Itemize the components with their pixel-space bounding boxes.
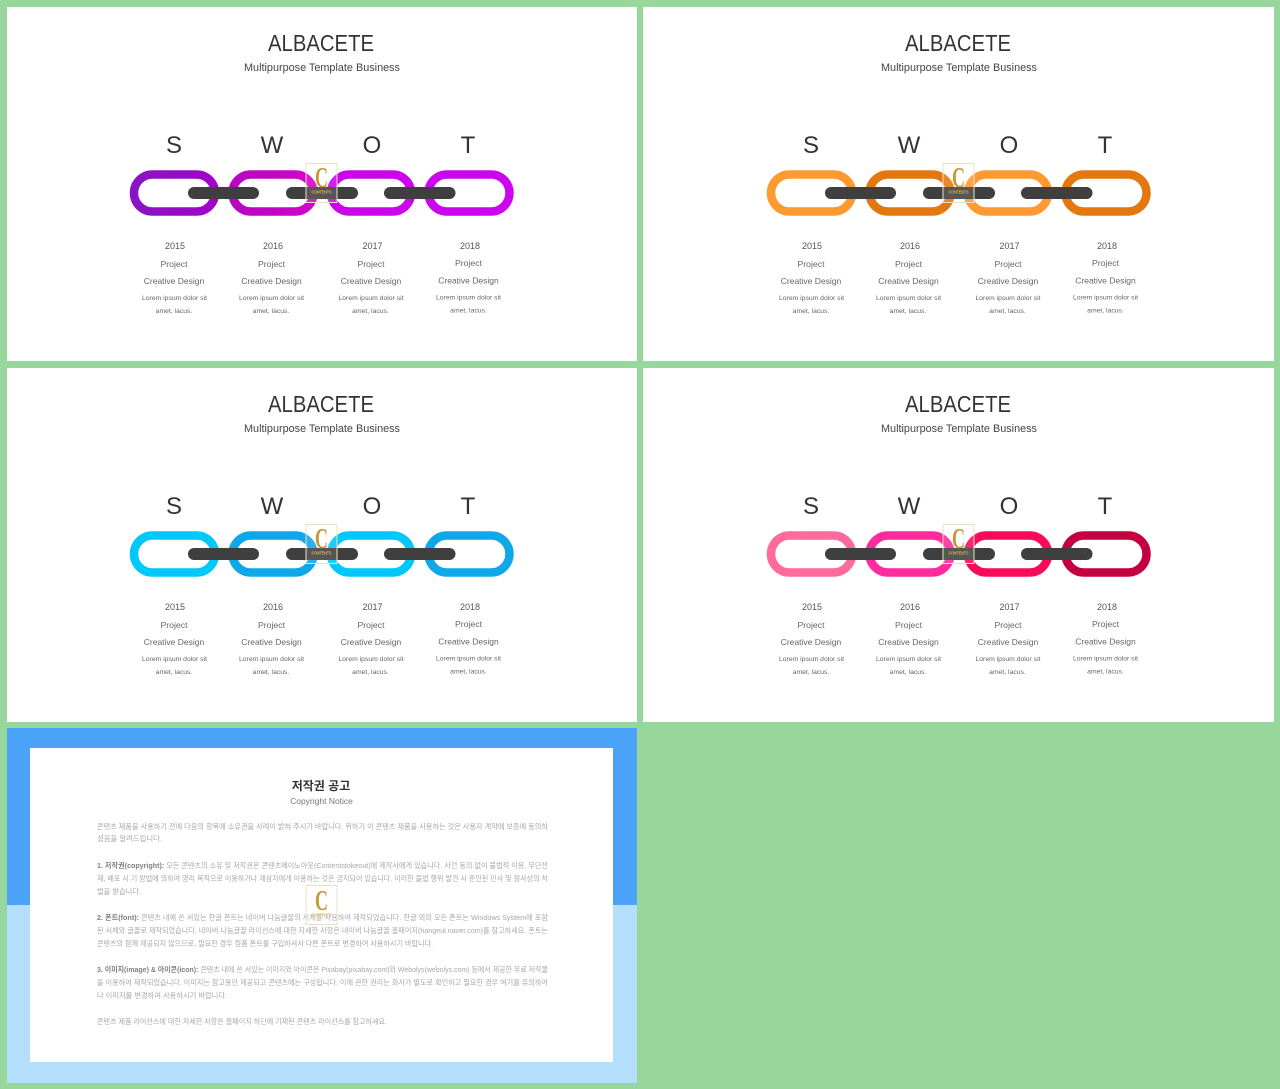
column texts: Creative Design bbox=[1075, 636, 1136, 646]
SWOT letters: W bbox=[898, 132, 921, 159]
column texts: 2016 bbox=[900, 241, 920, 251]
column texts: Project bbox=[895, 259, 923, 269]
column texts: 2018 bbox=[460, 241, 480, 251]
column texts: Creative Design bbox=[241, 637, 302, 647]
column texts: 2015 bbox=[165, 241, 185, 251]
column texts bbox=[779, 241, 1138, 315]
column texts: Lorem ipsum dolor sit bbox=[436, 294, 501, 302]
panel: SWOT pink bbox=[643, 368, 1274, 722]
column texts: Creative Design bbox=[144, 276, 205, 286]
title: ALBACETE bbox=[268, 391, 374, 417]
icon: watermark logo: C bbox=[952, 524, 965, 555]
column texts: amet, lacus. bbox=[156, 308, 192, 315]
chain links bbox=[134, 174, 510, 212]
intro text: 셨음을 알려드립니다. bbox=[97, 833, 162, 843]
column texts: amet, lacus. bbox=[890, 669, 926, 676]
column texts: Lorem ipsum dolor sit bbox=[779, 295, 844, 302]
column texts: 2015 bbox=[802, 602, 822, 612]
license note: 콘텐츠 제품 라이선스에 대한 자세한 사항은 홈페이지 하단에 기재된 콘텐츠 라이선스를 참고하세요. bbox=[97, 1016, 387, 1026]
column texts: Creative Design bbox=[341, 276, 402, 286]
SWOT letters: T bbox=[461, 493, 476, 520]
column texts: 2018 bbox=[1097, 241, 1117, 251]
column texts: amet, lacus. bbox=[1087, 308, 1124, 314]
SWOT letters bbox=[166, 493, 476, 520]
icon: watermark logo bbox=[306, 163, 337, 202]
icon: watermark logo: CONTENTS bbox=[312, 550, 332, 556]
column texts: amet, lacus. bbox=[352, 308, 389, 315]
column texts: Lorem ipsum dolor sit bbox=[876, 295, 941, 302]
column texts: Lorem ipsum dolor sit bbox=[142, 295, 207, 302]
section 1 copyright: 1. 저작권(copyright): 모든 콘텐츠의 소유 및 저작권은 콘텐츠메이노아웃(Contentstokeout)에 제작사에게 있습니다. 사전 동의 없이 불법적 이용, 무단전 bbox=[97, 860, 548, 870]
column texts: Creative Design bbox=[878, 637, 939, 647]
column texts: Creative Design bbox=[978, 276, 1039, 286]
icon: watermark logo: C bbox=[315, 524, 328, 555]
column texts: Project bbox=[895, 620, 923, 630]
column texts: Lorem ipsum dolor sit bbox=[239, 656, 304, 663]
section 1 copyright: 벌을 받습니다. bbox=[97, 886, 141, 896]
SWOT letters: T bbox=[1098, 132, 1113, 159]
column texts: Creative Design bbox=[781, 276, 842, 286]
column texts: Project bbox=[1092, 619, 1120, 629]
icon: watermark logo bbox=[943, 163, 974, 202]
column texts: Lorem ipsum dolor sit bbox=[142, 656, 207, 663]
title: ALBACETE bbox=[905, 391, 1011, 417]
section 3 image and icon: 을 이용하여 제작되었습니다. 이미지는 참고용만 제공되고 콘텐츠에는 구성됩니다. 이에 관한 권리는 회사가 별도로 확인하고 필요한 경우 여기를 유의하여 bbox=[97, 977, 548, 987]
column texts: 2016 bbox=[263, 241, 283, 251]
icon: watermark logo bbox=[306, 886, 337, 924]
column texts: 2018 bbox=[460, 602, 480, 612]
column texts: Project bbox=[160, 259, 188, 269]
column texts: amet, lacus. bbox=[156, 669, 192, 676]
section 2 font: 된 서체와 글꼴로 제작되었습니다. 네이버 나눔글꼴 라이선스에 대한 자세한 사항은 네이버 나눔글꼴 홈페이지(hangeul.naver.com)를 참고하세요. 폰트는 bbox=[97, 925, 548, 935]
chain links bbox=[771, 536, 1146, 572]
section 3 image and icon bbox=[97, 964, 548, 1000]
column texts: Project bbox=[160, 620, 188, 630]
icon: watermark logo: C bbox=[952, 163, 965, 194]
column texts: Project bbox=[258, 259, 286, 269]
panel: SWOT blue bbox=[7, 368, 637, 722]
section 3 image and icon: 나 이미지를 변경하여 사용하시기 바랍니다. bbox=[97, 990, 227, 1000]
heading: 저작권 공고 bbox=[292, 778, 350, 793]
icon: watermark logo: CONTENTS bbox=[312, 190, 332, 194]
subtitle: Multipurpose Template Business bbox=[244, 423, 400, 435]
column texts: 2016 bbox=[900, 602, 920, 612]
column texts bbox=[142, 241, 501, 315]
column texts: Creative Design bbox=[438, 276, 499, 286]
column texts: Project bbox=[357, 259, 385, 269]
column texts: Creative Design bbox=[781, 637, 842, 647]
column texts: Lorem ipsum dolor sit bbox=[976, 295, 1041, 302]
icon: watermark logo: CONTENTS bbox=[312, 912, 332, 918]
column texts: Lorem ipsum dolor sit bbox=[339, 656, 404, 663]
column texts: Lorem ipsum dolor sit bbox=[339, 295, 404, 302]
column texts: amet, lacus. bbox=[989, 308, 1026, 315]
subheading: Copyright Notice bbox=[290, 796, 353, 806]
chain links bbox=[771, 174, 1146, 212]
column texts: amet, lacus. bbox=[253, 669, 289, 676]
panel: copyright notice bbox=[7, 728, 637, 1083]
SWOT letters: W bbox=[898, 493, 921, 520]
column texts: 2018 bbox=[1097, 602, 1117, 612]
SWOT letters bbox=[803, 132, 1113, 159]
column texts: 2017 bbox=[999, 241, 1020, 251]
panel: SWOT orange bbox=[643, 7, 1274, 361]
SWOT letters: O bbox=[1000, 493, 1018, 520]
column texts: Lorem ipsum dolor sit bbox=[779, 656, 844, 663]
column texts: Project bbox=[258, 620, 286, 630]
column texts bbox=[142, 602, 501, 676]
subtitle: Multipurpose Template Business bbox=[881, 62, 1037, 74]
SWOT letters bbox=[166, 132, 476, 159]
SWOT letters: S bbox=[166, 493, 182, 520]
column texts: Project bbox=[797, 259, 825, 269]
column texts: Lorem ipsum dolor sit bbox=[239, 295, 304, 302]
SWOT letters: O bbox=[1000, 132, 1018, 159]
intro text bbox=[97, 821, 548, 843]
section 1 copyright bbox=[97, 860, 548, 896]
panel: SWOT purple bbox=[7, 7, 637, 361]
column texts: 2017 bbox=[362, 602, 383, 612]
column texts: Lorem ipsum dolor sit bbox=[876, 656, 941, 663]
SWOT letters: W bbox=[261, 493, 284, 520]
column texts: Lorem ipsum dolor sit bbox=[1073, 294, 1138, 302]
section 2 font: 콘텐츠의 함께 제공되지 않으므로, 필요한 경우 정품 폰트를 구입하셔서 다른 폰트로 변경하여 사용하시기 바랍니다. bbox=[97, 938, 433, 948]
column texts: Project bbox=[455, 258, 483, 268]
column texts: Creative Design bbox=[341, 637, 402, 647]
section 2 font bbox=[97, 912, 548, 948]
column texts: Project bbox=[455, 619, 483, 629]
column texts: 2017 bbox=[362, 241, 383, 251]
column texts: Project bbox=[994, 620, 1022, 630]
icon: watermark logo bbox=[306, 524, 337, 564]
column texts: Creative Design bbox=[878, 276, 939, 286]
column texts: 2017 bbox=[999, 602, 1020, 612]
icon: watermark logo: C bbox=[315, 886, 328, 917]
icon: watermark logo bbox=[943, 524, 974, 564]
icon: watermark logo: CONTENTS bbox=[948, 190, 968, 194]
icon: watermark logo: C bbox=[315, 163, 328, 194]
title: ALBACETE bbox=[268, 30, 374, 56]
column texts: amet, lacus. bbox=[793, 669, 829, 676]
column texts: Project bbox=[357, 620, 385, 630]
SWOT letters: O bbox=[363, 132, 381, 159]
SWOT letters bbox=[803, 493, 1113, 520]
column texts: amet, lacus. bbox=[352, 669, 389, 676]
column texts: Project bbox=[994, 259, 1022, 269]
column texts: 2015 bbox=[802, 241, 822, 251]
column texts: amet, lacus. bbox=[450, 668, 487, 676]
SWOT letters: O bbox=[363, 493, 381, 520]
SWOT letters: T bbox=[461, 132, 476, 159]
section 1 copyright: 재, 배포 시 기 방법에 의하여 영리 목적으로 이용하거나 제삼자에게 이용하는 것은 금지되어 있습니다. 이러한 불법 행위 발견 시 준인된 민사 및 형사상의 처 bbox=[97, 873, 548, 883]
column texts: Project bbox=[1092, 258, 1120, 268]
SWOT letters: S bbox=[803, 132, 819, 159]
chain links bbox=[134, 536, 510, 572]
column texts: Lorem ipsum dolor sit bbox=[976, 656, 1041, 663]
column texts: Creative Design bbox=[978, 637, 1039, 647]
column texts: Creative Design bbox=[241, 276, 302, 286]
column texts: Project bbox=[797, 620, 825, 630]
column texts: 2015 bbox=[165, 602, 185, 612]
SWOT letters: S bbox=[803, 493, 819, 520]
column texts: Lorem ipsum dolor sit bbox=[436, 656, 501, 662]
column texts: amet, lacus. bbox=[793, 308, 829, 315]
title: ALBACETE bbox=[905, 30, 1011, 56]
column texts: Creative Design bbox=[144, 637, 205, 647]
column texts bbox=[779, 602, 1138, 676]
subtitle: Multipurpose Template Business bbox=[881, 423, 1037, 435]
column texts: amet, lacus. bbox=[890, 308, 926, 315]
column texts: Creative Design bbox=[438, 636, 499, 646]
column texts: 2016 bbox=[263, 602, 283, 612]
SWOT letters: S bbox=[166, 132, 182, 159]
section 2 font: 2. 폰트(font): 콘텐츠 내에 쓴 서있는 한글 폰트는 네이버 나눔글꼴의 서체를 사용하여 제작되었습니다. 한글 외의 모든 폰트는 Windows System에 포함 bbox=[97, 912, 548, 922]
column texts: amet, lacus. bbox=[989, 669, 1026, 676]
intro text: 콘텐츠 제품을 사용하기 전에 다음의 항목에 소유권을 사례이 밝혀 주시기 바랍니다. 위하기 이 콘텐츠 제품을 사용하는 것은 사용자 계약에 보증에 동의하 bbox=[97, 821, 548, 831]
SWOT letters: T bbox=[1098, 493, 1113, 520]
section 3 image and icon: 3. 이미지(image) & 아이콘(icon): 콘텐츠 내에 쓴 서있는 이미지와 아이콘은 Pixabay(pixabay.com)와 Webolys(webolys.com) 등에서 제공한 무료 저작물 bbox=[97, 964, 548, 974]
column texts: amet, lacus. bbox=[450, 308, 487, 314]
column texts: Creative Design bbox=[1075, 276, 1136, 286]
column texts: amet, lacus. bbox=[253, 308, 289, 315]
icon: watermark logo: CONTENTS bbox=[948, 550, 968, 556]
SWOT letters: W bbox=[261, 132, 284, 159]
column texts: Lorem ipsum dolor sit bbox=[1073, 656, 1138, 662]
subtitle: Multipurpose Template Business bbox=[244, 62, 400, 74]
column texts: amet, lacus. bbox=[1087, 668, 1124, 676]
